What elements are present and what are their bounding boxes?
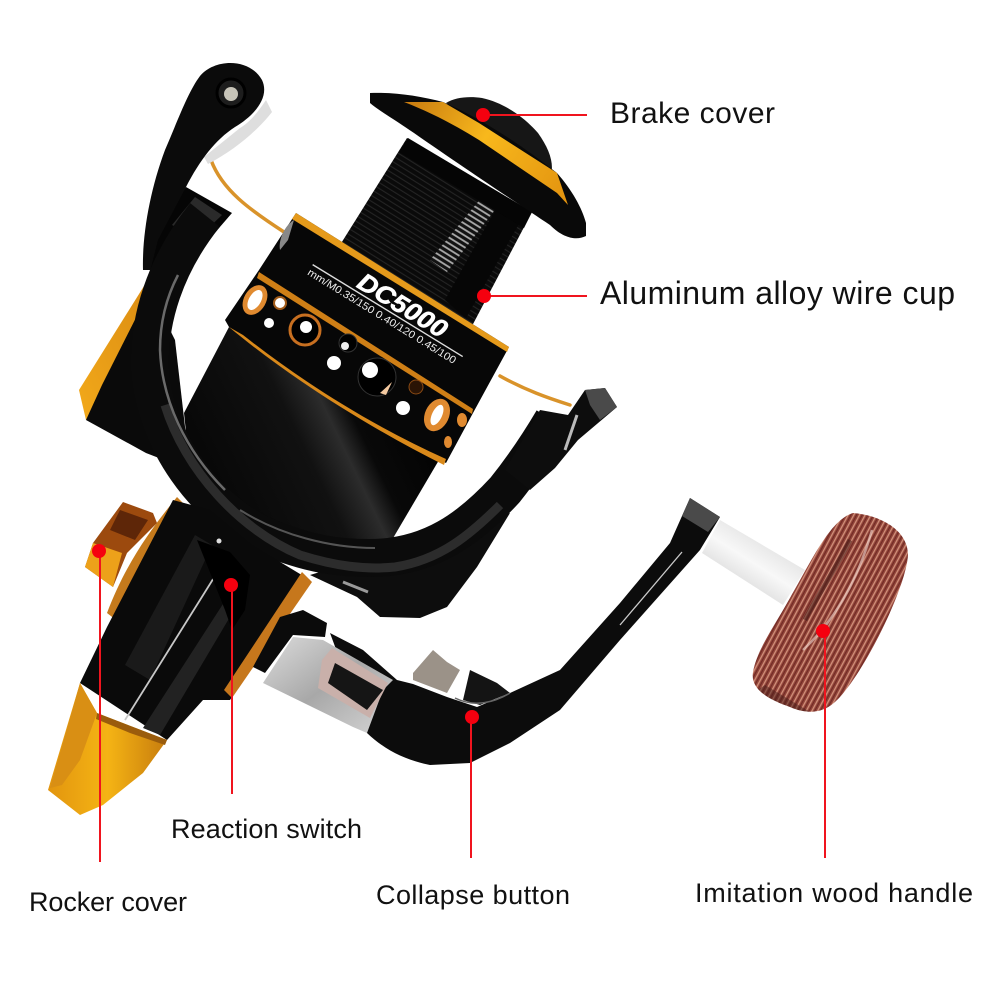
- callout: rocker cover: [29, 544, 187, 917]
- rocker knob: [85, 497, 190, 620]
- callout: aluminum alloy wire cup: Aluminum alloy wire cup: [600, 275, 955, 311]
- callout: rocker cover: Rocker cover: [29, 887, 187, 917]
- lower frame foot: [310, 513, 510, 618]
- front flange: [370, 93, 586, 238]
- model text: mm/M0.35/150 0.40/120 0.45/100: [305, 267, 458, 367]
- model text: [305, 243, 476, 369]
- handle bump: [413, 650, 460, 693]
- bail frame: [150, 215, 553, 568]
- vented holes: [237, 281, 467, 448]
- bail arm upper left: [143, 63, 272, 280]
- callout: reaction switch: Reaction switch: [171, 814, 362, 844]
- callout: reaction switch: [171, 578, 362, 844]
- callout: brake cover: Brake cover: [610, 97, 775, 130]
- gold gear ring: [224, 572, 312, 698]
- callout: collapse button: Collapse button: [376, 880, 570, 910]
- handle silver joint: [263, 637, 393, 733]
- gold tip cap: [48, 683, 167, 815]
- gold side plate: [79, 270, 154, 420]
- callout: collapse button: [376, 710, 570, 910]
- illustration: fishing reel: [48, 63, 920, 815]
- black side plate: [86, 290, 190, 470]
- callout: brake cover: [476, 97, 775, 130]
- infographic: spinning reel parts: [31, 63, 972, 912]
- lower spool body: [184, 327, 439, 550]
- handle arm: [330, 498, 720, 765]
- wood knob: [752, 513, 908, 712]
- wire cup skirt: [225, 213, 509, 465]
- spool with threads: [340, 138, 532, 326]
- model text: DC5000: [352, 268, 452, 344]
- callout: imitation wood handle: [695, 624, 973, 908]
- gearbox body: [80, 500, 310, 740]
- gold bail wire: [211, 160, 570, 405]
- callout: imitation wood handle: Imitation wood handle: [695, 878, 973, 908]
- handle shaft: [702, 520, 805, 605]
- gear collar: [253, 610, 327, 673]
- bail tip: [505, 388, 617, 490]
